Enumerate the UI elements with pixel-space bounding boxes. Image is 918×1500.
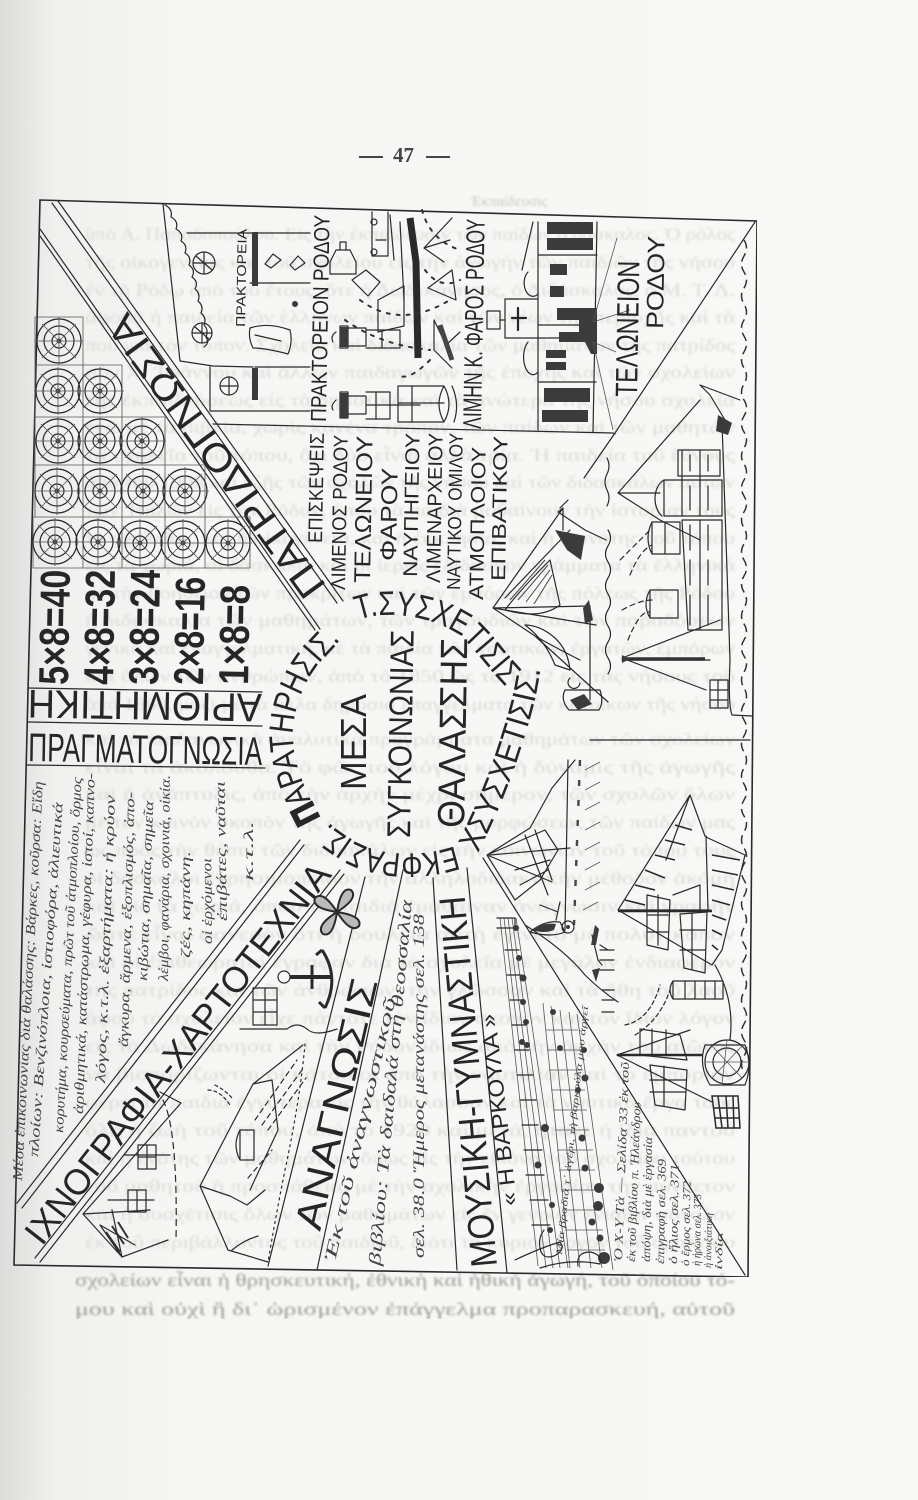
bleed-through text from the facing page: ὅλη ἡ ζωὴ τοῦ τόπου, ἀπὸ τὸ 1920 καὶ μετά, ἤτανε ἡ ἰδία παντοῦ	[85, 1120, 735, 1140]
bleed-through text from the facing page: εἶναι τὰ ἀκόλουθα. Τὸ φῶς τοῦ λόγου καὶ ἡ δύναμις τῆς ἀγωγῆς	[85, 756, 735, 777]
bleed-through text from the facing page: εἰς τὰ Δωδεκάνησα καὶ τὴν Ρόδον ἰδίως ἀπὸ τὴν ἀρχὴν τοῦ αἰῶνος	[85, 1036, 735, 1056]
handwritten music references: ἐκ τοῦ βιβλίου π. Ἠλεάνδρου	[624, 1101, 644, 1262]
bleed-through text from the facing page: καὶ ὅλων τῶν ἀνθρώπων, ἀπὸ τὸ 1850 ὡς τὸ 1912 εἰς τὰς νήσους τοῦ	[85, 666, 735, 686]
handwritten notes: sea transport: κ.τ.λ.	[242, 821, 257, 881]
list: correlation topics: ΑΤΜΟΠΛΟΙΟΥ	[466, 447, 491, 600]
icon: anchor with flag	[240, 950, 337, 1033]
heading: ΑΡΙΘΜΗΤΙΚΗ (upside down): ΑΡΙΘΜΗΤΙΚΗ	[27, 681, 262, 729]
picture frame	[14, 200, 757, 1277]
bleed-through text from the facing page: τῶν Ἰταλῶν εἰς τὴν Ρόδον, ὅπου τὰ παιδιὰ μαθαίνουν τὴν ἱστορίαν τους	[85, 500, 735, 520]
bleed-through text from the facing page: ὡς πρὸς τὴν θέσιν τῶν διδασκάλων εἰς τὴν κοινωνίαν τοῦ τόπου τους	[85, 840, 735, 860]
bleed-through text from the facing page: ὑπὸ Α. Παπαδοπούλου. Εἰς τὴν ἐκπαίδευσιν τῶν παίδων ὁ δάσκαλος. Ὁ ρόλος	[85, 224, 735, 244]
bleed-through text from the facing page: σὺν Χ. Ἰωάννου καὶ ἄλλων παιδαγωγῶν τῆς ἐποχῆς καὶ τῶν σχολείων	[85, 362, 735, 382]
bleed-through text from the facing page: καὶ οἱ ἐπιθεωρηταὶ ἔγραφαν διὰ τὰ σχολεῖα μὲ μεγάλον ἐνδιαφέρον	[85, 952, 735, 972]
list: correlation topics: ΤΕΛΩΝΕΙΟΥ	[349, 436, 378, 583]
bleed-through text from the facing page: τὸ σχολεῖον, καὶ ἡ οἰκογένεια, καὶ ἡ ἐκκλησία, καὶ ἡ κοινότης τοῦ τόπου	[85, 528, 735, 548]
bleed-through text from the facing page: ἀφοῦ τὸ σχολεῖον εἶχε πάντοτε τὸν ἴδιον σκοπὸν καὶ τὸν ἴδιον λόγον	[85, 1007, 735, 1028]
handwritten music references: ἡ ἠρώνα σελ. 373	[691, 1193, 704, 1266]
handwritten reading notes: βιβλίου: Τὰ δαιδαλά στὴ θεοσσαλία	[365, 897, 416, 1268]
ring text: ΕΚΦΡΑΣΙΣ: ΕΚΦΡΑΣΙΣ.	[322, 824, 460, 877]
bleed-through text from the facing page: νὰ βιοπορίζωνται οἱ κάτοικοι ἀπὸ τὴν ναυτιλίαν καὶ τὸ ἐμπόριον	[85, 1064, 735, 1084]
heading: ΠΡΑΓΜΑΤΟΓΝΩΣΙΑ	[27, 726, 265, 774]
bleed-through text from the facing page: καὶ εἰς τὰ χωριά, ὅπου τὰ παιδιὰ ἐμάθαιναν ἀνάγνωσιν καὶ γραφήν	[85, 896, 735, 916]
song title: « Η ΒΑΡΚΟΥΛΑ »	[475, 1013, 522, 1207]
bleed-through text from the facing page: ἡ διδασκαλία τῶν μαθημάτων, τῶν τραγουδιῶν καὶ τῶν παραδόσεων	[85, 610, 735, 630]
handwritten notes: sea transport: λόγος, κ.τ.λ. ἐξαρτήματα: ἡ κρύον	[94, 794, 119, 1085]
divider rays, lower half	[268, 858, 745, 1275]
handwritten notes: sea transport: ἐπιβάτες, ναῦται	[214, 781, 231, 921]
bleed-through text from the facing page: ὥστε εἶναι φανερὸν ὅτι ἡ δουλειὰ αὐτὴ ἐγίνετο μὲ πολὺν κόπον	[85, 923, 735, 944]
handwritten music references: ἀπόψη, διὰ μὲ ἐργασία	[639, 1136, 655, 1262]
inner headings: ΧΣΥΣΧΕΤΙΣΙΣ.	[458, 671, 540, 852]
handwritten notes: sea transport: λέμβοι, φανάρια, σχοινιά, οἰκία.	[157, 775, 174, 982]
bleed-through text from the facing page: τῆς πατρίδος καὶ τῶν ἀνθρώπων, τὴν γλῶσσαν καὶ τὰ ἤθη τοῦ λαοῦ	[85, 980, 735, 1000]
wavy sea edge, right side	[742, 240, 746, 1072]
bleed-through text from the facing page: ἀπὸ 1860, μαζὶ μὲ τὰ ἄλλα δημόσια ἐπαγγέλματα τῶν κατοίκων τῆς νήσου	[85, 694, 735, 714]
panel: shipping agents office: ΠΡΑΚΤΟΡΕΙΟΝ ΡΟΔΟΥ	[306, 214, 335, 422]
inner headings	[333, 630, 540, 852]
illustration: lower-left boats	[83, 1044, 306, 1262]
handwritten music references: ἐπιγραφὴ σελ. 369	[653, 1159, 669, 1264]
panel: customs house: ΤΕΛΩΝΕΙΟΝ	[609, 261, 646, 397]
propeller icon	[314, 889, 360, 935]
bleed-through text from the facing page: ἀπὸ τοῦ 1908 καὶ ἑξῆς τῶν σχολῶν τῆς νήσου καὶ τῶν διδασκάλων αὐτῶν	[85, 472, 735, 492]
bleed-through text from the facing page: ἐν τῇ Ρόδῳ ἀπὸ τοῦ ἔτους, ὅτε ἡ Δωδεκάνησος, ὁ Διδάσκαλος, ὁ Μ. Τ. Λ.	[85, 280, 735, 300]
bleed-through text from the facing page: ἐνῶ μὲ τὰ βιβλία, χωρὶς κανένα τρόπον, τῶν παίδων καὶ τῶν μαθητῶν	[85, 417, 735, 437]
handwritten reading notes: Ἐκ τοῦ ἀναγνωστικοῦ	[320, 995, 400, 1263]
handwritten notes: sea transport: ἀριθμητικά, κατάστρωμα, γέφυρα, ἱστοί, καπνο-	[72, 772, 99, 1114]
bleed-through text from the facing page: ποῦ γιὰ τὸν τόπον. Σχολεῖα καὶ διδασκαλία τῶν μαθημάτων τῆς πατρίδος	[85, 335, 735, 355]
bleed-through text from the facing page: καὶ τὰ παιδαγωγικὰ ἀναλυτικὰ προγράμματα μαθημάτων τῶν σχολείων	[85, 729, 735, 749]
panel: customs house: ΡΟΔΟΥ	[642, 236, 671, 329]
bleed-through text from the facing page: καὶ ἡ συσχέτισις ὅλων τῶν μαθημάτων εἰς ἕν γενικὸν ἑνιαῖον σύνολον	[85, 1204, 735, 1224]
bleed-through text from the facing page	[75, 194, 736, 1319]
band: ΠΑΤΡΙΔΟΓΝΩΣΙΑ: ΠΑΤΡΙΔΟΓΝΩΣΙΑ	[100, 306, 334, 606]
bleed-through text from the facing page: καὶ ἡ ἀνάπτυξις, ἀπὸ τὴν ἀρχὴν μέχρι σήμερον, τῶν σχολῶν ὅλων	[85, 784, 735, 804]
ring text: ΣΥΣΧΕΤΙΣΙΣ: Τ.ΣΥΣΧΕΤΙΣΙΣ	[352, 591, 522, 686]
panel: customs house	[487, 222, 671, 434]
panel: port of Rhodes with lighthouse: ΛΙΜΗΝ Κ. ΦΑΡΟΣ ΡΟΔΟΥ	[457, 219, 491, 429]
bleed-through text from the facing page: τῆς ἐκπαιδεύσεως εἰς τὰ δημοτικὰ καὶ τὰ ἀνώτερα τῆς νήσου σχολεῖα	[85, 390, 736, 410]
divider diagonal from top-right corner	[560, 222, 755, 508]
heading: ΠΡΑΓΜΑΤΟΓΝΩΣΙΑ: ΠΡΑΓΜΑΤΟΓΝΩΣΙΑ	[28, 726, 263, 774]
bleed-through text from the facing page: τὰ σχολεῖα τοῦ τόπου, ὄχι δύο εἶναι ἀλλὰ τρία. Ἡ παιδεία τοῦ ἔθνους	[85, 444, 735, 465]
handwritten notes: sea transport: οἱ ἐρχόμενοι	[200, 858, 216, 944]
bleed-through text from the facing page: μου καὶ οὐχὶ ἢ δι᾿ ὡρισμένον ἐπάγγελμα προπαρασκευή, αὐτοῦ	[75, 1299, 735, 1319]
handwritten notes: sea transport: κορυτήμα, κουρσεύματα, πρῶτ τοῦ ἀτμοπλοίου, ὅρμος	[52, 777, 86, 1133]
music staves: Μία βραδιὰ τ᾿ ἀγέρι, τὴ βαρκούλα μου ἀργεῖ	[554, 1003, 590, 1257]
bleed-through text from the facing page: φέρει τὰ παιδιὰ ἐγγύτερα εἰς τὴν θάλασσαν καὶ τὰ ναυτικὰ ἔργα τους	[85, 1092, 735, 1112]
bleed-through text from the facing page: σχολείων εἶναι ἡ θρησκευτική, ἐθνικὴ καὶ ἠθικὴ ἀγωγή, τοῦ ὁποίου τό-	[75, 1269, 735, 1290]
page number	[359, 143, 450, 167]
handwritten notes: sea transport: κιβώτια, σημαῖα, σημεῖα	[136, 800, 157, 981]
bleed-through text from the facing page: οἱ δάσκαλοι ἐχρησιμοποίουν τὴν ἀλληλοδιδακτικὴν μέθοδον ἀκόμη	[85, 868, 735, 888]
handwritten music references: ἰνδία	[714, 1230, 726, 1270]
heading: ΜΟΥΣΙΚΗ-ΓΥΜΝΑΣΤΙΚΗ: ΜΟΥΣΙΚΗ-ΓΥΜΝΑΣΤΙΚΗ	[432, 895, 505, 1269]
bleed-through text from the facing page: τῆς οἰκογενείας καὶ τοῦ σχολείου εἰς τὴν ἀγωγὴν τῶν παιδιῶν τῆς νήσου	[85, 252, 735, 272]
panel: shipping agents office	[163, 204, 335, 422]
handwritten music references	[611, 1061, 726, 1270]
inner headings: ΣΥΓΚΟΙΝΩΝΙΑΣ	[380, 630, 421, 838]
music staves	[497, 918, 613, 1270]
panel: shipping agents office: ΠΡΑΚΤΟΡΕΙΑ	[233, 228, 250, 327]
handwritten music references: ὁ ἔρμος σελ. 372	[680, 1180, 693, 1266]
list: correlation topics	[305, 432, 513, 600]
handwritten music references: Ὁ Χ-Υ Τὰ — Σελίδα 33 ἐκ τοῦ	[611, 1061, 632, 1262]
multiplication table: 2×8=16	[165, 576, 214, 685]
handwritten reading notes: σελ. 38.0 Ἥμερος μετανάστης σελ. 138	[411, 914, 428, 1258]
list: correlation topics: ΝΑΥΠΗΓΕΙΟΥ	[400, 433, 425, 577]
bleed-through text from the facing page: γενικὴ καὶ ἐπαγγελματική, μὲ τὰ παιδία τῶν ναυτικῶν, ἐργατῶν, ἐμπόρων	[84, 638, 735, 658]
multiplication table: 3×8=24	[120, 569, 169, 685]
list: correlation topics: ΛΙΜΕΝΟΣ ΡΟΔΟΥ	[328, 435, 353, 590]
bleed-through text from the facing page: ἐκ τοῦ περιβάλλοντος τοῦ παιδιοῦ, διότι τὸ κύριον ἔργον τοῦ σχολείου	[85, 1232, 735, 1252]
bleed-through text from the facing page: τοῦ μαθητοῦ ἡ προσπάθεια, μὲ τὴν σχολικὴν ἐργασίαν τὴν σύνθετον	[85, 1176, 735, 1196]
panel: port of Rhodes with lighthouse	[213, 210, 613, 433]
list: correlation topics: ΦΑΡΟΥ	[375, 468, 403, 561]
handwritten reading notes	[320, 897, 428, 1268]
list: correlation topics: ΕΠΙΣΚΕΨΕΙΣ	[305, 433, 329, 543]
bleed-through text from the facing page: καὶ ἡ ἐνότης τῶν μαθημάτων, ὅπως εἰς τὴν εἰκόνα τοῦ σχολείου τούτου	[85, 1148, 735, 1168]
handwritten notes: sea transport: Μέσα ἐπικοινωνίας διὰ θαλάσσης: Βάρκες, κοῦρσα: Εἴδη	[11, 781, 47, 1182]
illustration: lower right sailing vessels	[487, 740, 750, 1128]
ring text: ΠΑΡΑΤΗΡΗΣΙΣ: ΠΑΡΑΤΗΡΗΣΙΣ.	[269, 631, 339, 828]
heading: ΑΝΑΓΝΩΣΙΣ: ΑΝΑΓΝΩΣΙΣ	[288, 974, 387, 1234]
inner headings: ΘΑΛΑΣΣΗΣ	[431, 637, 476, 828]
list: correlation topics: ΛΙΜΕΝΑΡΧΕΙΟΥ	[423, 433, 448, 583]
list: correlation topics: ΝΑΥΤΙΚΟΥ ΟΜΙΛΟΥ	[444, 432, 468, 590]
multiplication table: 4×8=32	[75, 569, 124, 685]
band: ΠΑΤΡΙΔΟΓΝΩΣΙΑ	[40, 201, 343, 630]
handwritten notes: sea transport: ζές, κηπάνη.	[179, 851, 194, 958]
list: correlation topics: ΕΠΙΒΑΤΙΚΟΥ	[488, 436, 513, 581]
handwritten notes: sea transport: ἄγκυρα, ἄρμενα, ἐξοπλισμός, ἀπο-	[117, 791, 139, 1047]
illustration: sailing boat and steam ship	[493, 385, 752, 716]
multiplication table: 5×8=40	[30, 569, 79, 685]
inner headings: ΜΕΣΑ	[333, 694, 374, 790]
rosette grid	[31, 317, 252, 568]
bleed-through text from the facing page: μὲ τὸν κοινὸν σκοπὸν τῆς ἀγωγῆς καὶ τῆς μορφώσεως τῶν παίδων μας	[85, 812, 735, 832]
handwritten music references: ἡ ἀνοιξιάτικη	[703, 1213, 715, 1268]
handwritten notes: sea transport	[11, 772, 257, 1182]
multiplication table	[30, 569, 259, 685]
bleed-through text from the facing page: εἰς τὰ χωριά, οἱ δάσκαλοι καὶ οἱ ἱερεῖς ἐδίδασκον γράμματα τὰ ἑλληνικά	[85, 555, 736, 575]
page number: 47	[393, 143, 414, 167]
bleed-through text from the facing page: Ἐκπαίδευσις	[470, 194, 547, 210]
bleed-through text from the facing page: ἀφορᾷ ἡ παιδεία τῶν ἑλλήνων παίδων καὶ τῶν νέων τῆς περιοχῆς καὶ τὰ	[85, 307, 736, 327]
handwritten notes: sea transport: πλοίων: Βενζινόπλοια, ἱστιοφόρα, ἀλιευτικά	[27, 801, 67, 1157]
bleed-through text from the facing page: μὲ τὴν βοήθειαν τῶν προκρίτων καὶ τῶν ἐμπόρων τῆς πόλεως τῆς Ρόδου	[85, 583, 735, 603]
handwritten music references: ὁ ἥλιος σελ. 371	[666, 1164, 682, 1264]
multiplication table: 1×8=8	[210, 584, 259, 685]
band: ΙΧΝΟΓΡΑΦΙΑ-ΧΑΡΤΟΤΕΧΝΙΑ: ΙΧΝΟΓΡΑΦΙΑ-ΧΑΡΤΟΤΕΧΝΙΑ	[16, 855, 339, 1252]
